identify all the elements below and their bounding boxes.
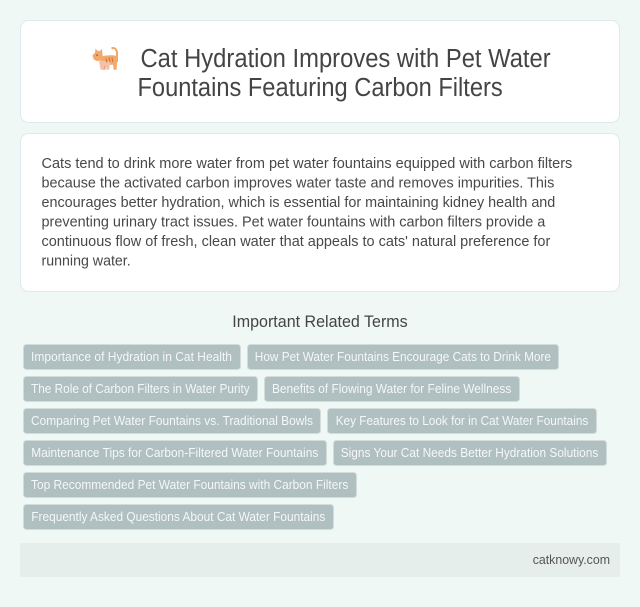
panel: related terms chips xyxy=(24,344,606,530)
title xyxy=(138,45,551,102)
chip: role of carbon filters xyxy=(24,376,258,402)
chip: comparing fountains vs bowls xyxy=(24,408,320,434)
description text: encourages better hydration, which is essential for maintaining kidney health and xyxy=(42,194,555,211)
chip: key features xyxy=(328,408,596,434)
chip: how fountains encourage: How Pet Water Fountains Encourage Cats to Drink More xyxy=(255,349,551,364)
chip: benefits of flowing water xyxy=(264,376,520,402)
chip: top recommended: Top Recommended Pet Water Fountains with Carbon Filters xyxy=(31,477,348,492)
title: Cat Hydration Improves with Pet Water xyxy=(140,45,551,73)
chip: comparing fountains vs bowls: Comparing Pet Water Fountains vs. Traditional Bowls xyxy=(31,413,313,428)
title: Fountains Featuring Carbon Filters xyxy=(138,74,503,102)
description text: running water. xyxy=(42,252,131,270)
panel: description card xyxy=(20,134,620,292)
chip: key features: Key Features to Look for in Cat Water Fountains xyxy=(336,413,588,428)
chip: role of carbon filters: The Role of Carbon Filters in Water Purity xyxy=(31,381,250,396)
chip: importance of hydration xyxy=(24,344,240,370)
footer bar xyxy=(20,543,620,577)
chip: signs your cat needs hydration: Signs Your Cat Needs Better Hydration Solutions xyxy=(341,445,598,460)
footer source text: catknowy.com xyxy=(533,552,610,567)
chip: how fountains encourage xyxy=(248,344,558,370)
chip: faq: Frequently Asked Questions About Cat Water Fountains xyxy=(31,509,325,524)
chip: top recommended xyxy=(24,472,356,498)
panel: title card xyxy=(20,20,620,122)
chip: maintenance tips xyxy=(24,440,326,466)
description text: because the activated carbon improves water taste and removes impurities. This xyxy=(42,174,554,192)
chip: signs your cat needs hydration xyxy=(334,440,606,466)
description text: Cats tend to drink more water from pet water fountains equipped with carbon filters xyxy=(42,155,572,172)
description text xyxy=(42,155,572,270)
heading: important related terms: Important Related Terms xyxy=(232,312,408,331)
chip: maintenance tips: Maintenance Tips for Carbon-Filtered Water Fountains xyxy=(31,445,318,460)
icon: cat xyxy=(92,48,117,70)
description text: continuous flow of fresh, clean water that appeals to cats' natural preference for xyxy=(42,233,550,250)
chip: importance of hydration: Importance of Hydration in Cat Health xyxy=(31,349,232,364)
chip: benefits of flowing water: Benefits of Flowing Water for Feline Wellness xyxy=(272,381,511,396)
chip: faq xyxy=(24,504,334,530)
description text: preventing urinary tract issues. Pet water fountains with carbon filters provide a xyxy=(42,214,546,230)
